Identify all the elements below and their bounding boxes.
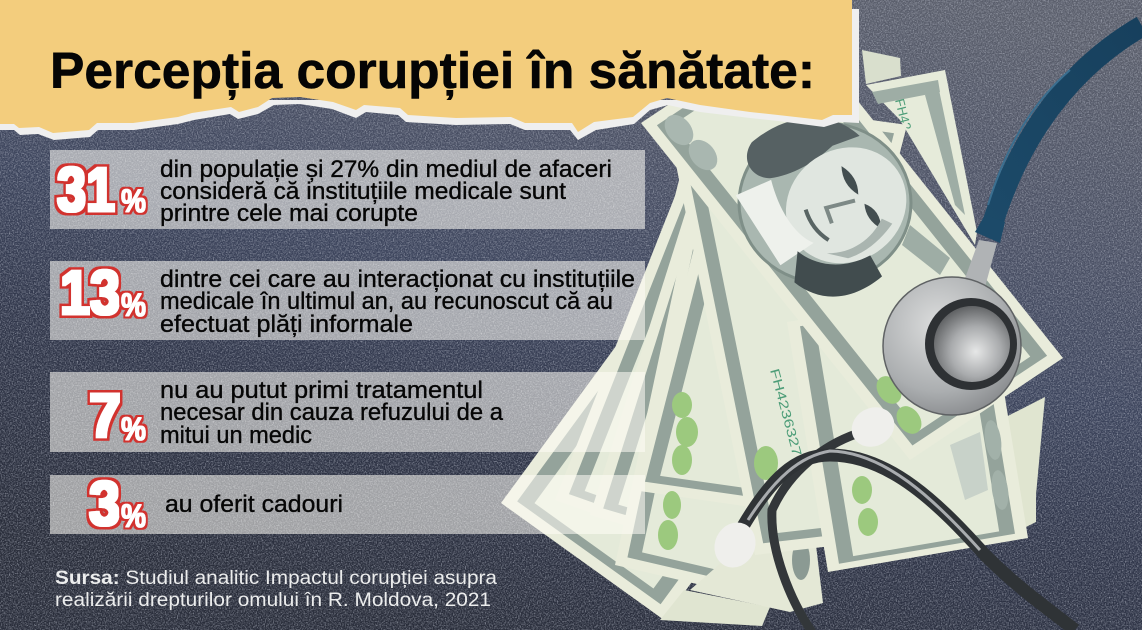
source note: Sursa: Studiul analitic Impactul corupției asupra (55, 568, 497, 589)
end ovals (659, 109, 699, 151)
bill: lower right details (950, 419, 1011, 511)
title: Percepția corupției în sănătate: (50, 42, 815, 100)
panel: 7% (50, 372, 645, 452)
serial number: FH4236327 (767, 367, 805, 458)
bill: bottom edge piece (690, 537, 823, 612)
bill oval (792, 540, 810, 580)
bill: bottom sliver (660, 590, 770, 626)
green marks (871, 371, 907, 409)
end ovals second (683, 134, 723, 176)
panel: 3% (50, 470, 645, 539)
text block (160, 377, 504, 449)
bill: upper right: FH42 (892, 97, 914, 132)
stat: 3%: 3 (89, 470, 120, 539)
text block: medicale în ultimul an, au recunoscut că au (160, 288, 613, 315)
bill: upper right (866, 70, 977, 245)
illustration: stethoscope (707, 26, 1142, 630)
bill: small top piece (862, 50, 901, 84)
tube highlight (988, 70, 1070, 205)
treasury text block (902, 225, 950, 275)
green hundred marks (658, 392, 878, 550)
chest cup (934, 306, 1010, 382)
text block (160, 156, 612, 227)
stat: 13%: 13 (60, 259, 120, 328)
text block: au oferit cadouri (165, 491, 343, 518)
bill: left stack three (590, 135, 880, 565)
bill: right stack (1000, 397, 1045, 530)
first ear tube (742, 455, 1075, 630)
stat: 7%: % (121, 411, 146, 447)
text block: dintre cei care au interacționat cu instituțiile (160, 266, 635, 293)
bill: lower centre-left (615, 165, 872, 605)
main bill with portrait (641, 21, 1063, 460)
text block: efectuat plăți informale (160, 311, 413, 338)
tube sheen (748, 451, 980, 550)
green marks second (891, 401, 927, 439)
stat: 3%: % (121, 498, 146, 534)
text block: consideră că instituțiile medicale sunt (160, 178, 566, 205)
lower earpiece (707, 516, 763, 574)
chest disc (883, 277, 1021, 415)
bill: lower left-centre (632, 100, 907, 515)
upper earpiece (844, 400, 902, 454)
bill: far left tip (501, 155, 919, 620)
stat: 31%: % (121, 183, 146, 219)
stat: 7%: 7 (89, 382, 121, 451)
tube (990, 26, 1142, 232)
medallion (739, 123, 911, 283)
torn paper edge (0, 9, 859, 140)
bill: lower right (787, 288, 1028, 572)
text block: necesar din cauza refuzului de a (160, 399, 504, 426)
illustration: fan of dollar bills (501, 21, 1063, 626)
bill: left stack one (597, 110, 867, 550)
text block: din populație și 27% din mediul de afaceri (160, 156, 612, 183)
source note: realizării drepturilor omului în R. Moldova, 2021 (55, 590, 491, 611)
stat: 3% (89, 470, 146, 539)
portrait (714, 83, 942, 320)
panel: 31% (50, 150, 645, 229)
stat: 31%: 31 (57, 156, 115, 225)
text block (160, 266, 635, 338)
metal stem (960, 240, 997, 298)
stat: 13%: % (121, 287, 146, 323)
source note (55, 568, 497, 611)
text block: mitui un medic (160, 422, 312, 449)
tube sleeve (975, 215, 1005, 243)
bill: left stack two (555, 120, 875, 560)
second ear tube (772, 434, 856, 630)
text block: printre cele mai corupte (160, 200, 418, 227)
title banner (0, 0, 852, 133)
bill: centre (670, 115, 927, 555)
panel: 13% (50, 259, 645, 340)
text block: nu au putut primi tratamentul (160, 377, 483, 404)
chest ring (925, 298, 1017, 390)
stat: 7% (89, 382, 146, 451)
